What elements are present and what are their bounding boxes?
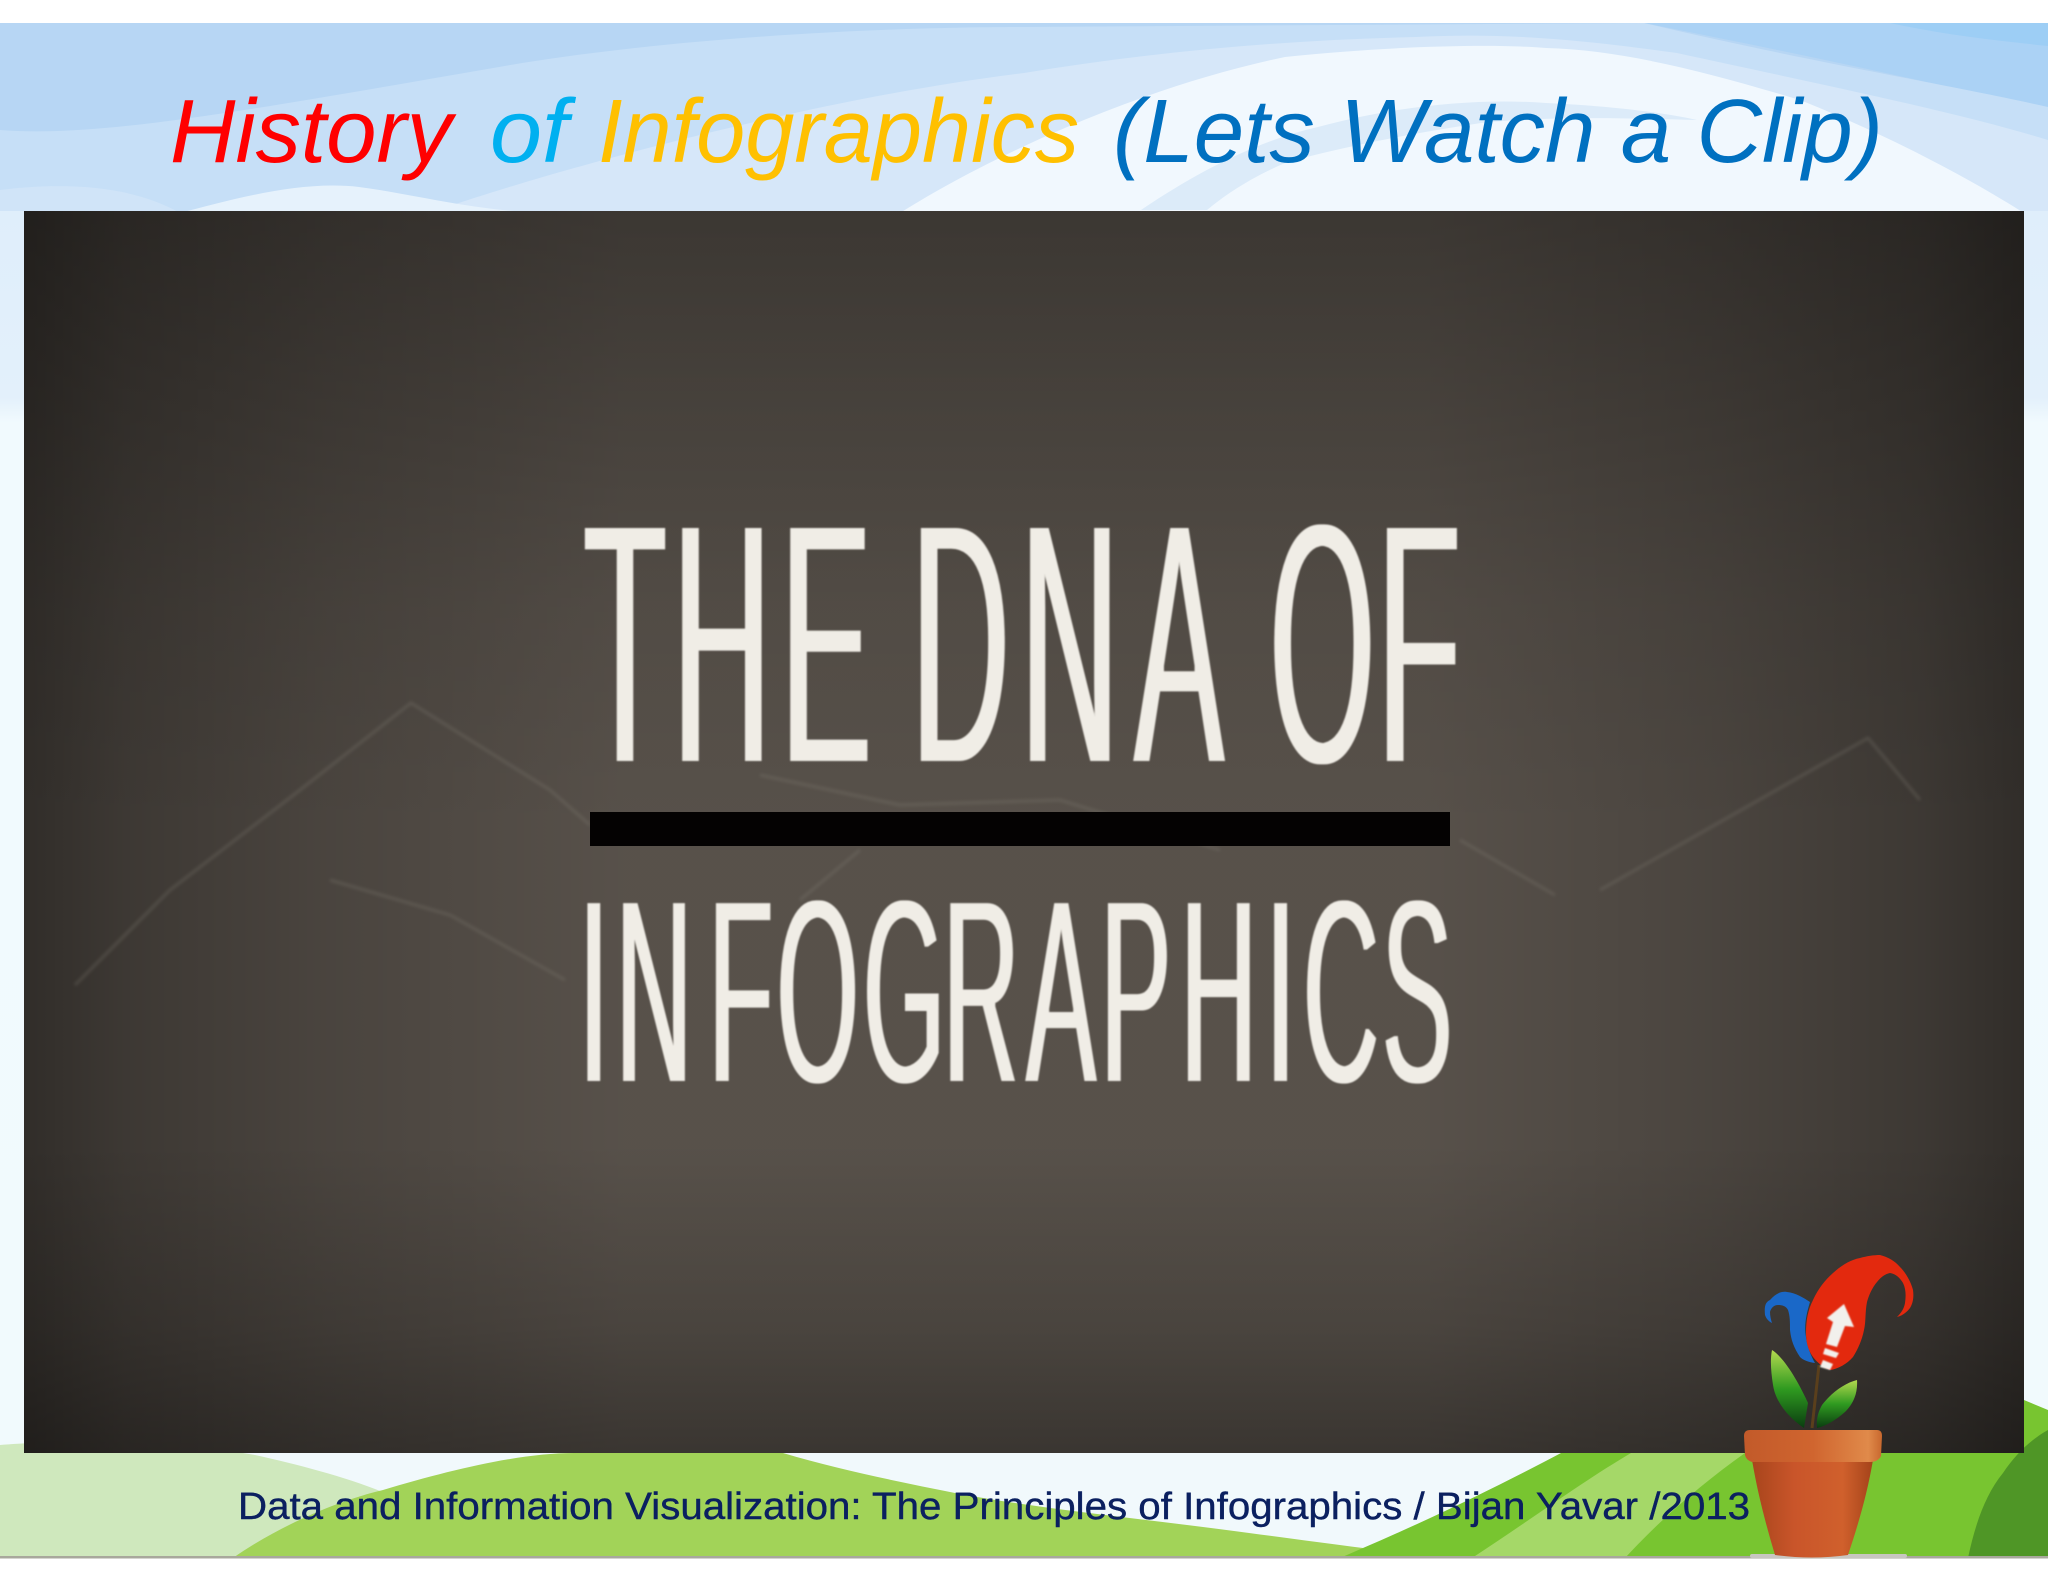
icon: potted plant with arrow flame [1744, 1255, 1913, 1558]
stem [1812, 1365, 1819, 1428]
pale green hill [0, 1442, 390, 1558]
right green hills [1340, 1400, 2048, 1558]
red petal [1806, 1255, 1913, 1370]
right leaf [1817, 1380, 1857, 1428]
pot rim [1744, 1430, 1882, 1462]
heading line 1: THE DNA OF [584, 450, 1460, 837]
bottom grass banner [0, 1400, 2048, 1558]
title: of [490, 82, 576, 182]
left leaf [1771, 1350, 1808, 1428]
title: Infographics [598, 82, 1079, 182]
footer text: Data and Information Visualization: The Principles of Infographics / Bijan Yavar /2013 [238, 1486, 1750, 1528]
heading line 2: INFOGRAPHICS [579, 846, 1452, 1139]
video still panel [24, 211, 2024, 1453]
title: History [170, 82, 457, 182]
pot body [1752, 1460, 1873, 1558]
blue petal [1765, 1292, 1815, 1363]
faint chart lines [75, 703, 1920, 985]
black divider bar [590, 812, 1450, 846]
top sky banner [0, 23, 2048, 213]
green hill [233, 1453, 1390, 1558]
saucer [1750, 1554, 1907, 1558]
title [170, 82, 1883, 182]
side strips [0, 211, 2048, 1456]
white arrow [1820, 1304, 1854, 1370]
title: (Lets Watch a Clip) [1113, 82, 1883, 182]
